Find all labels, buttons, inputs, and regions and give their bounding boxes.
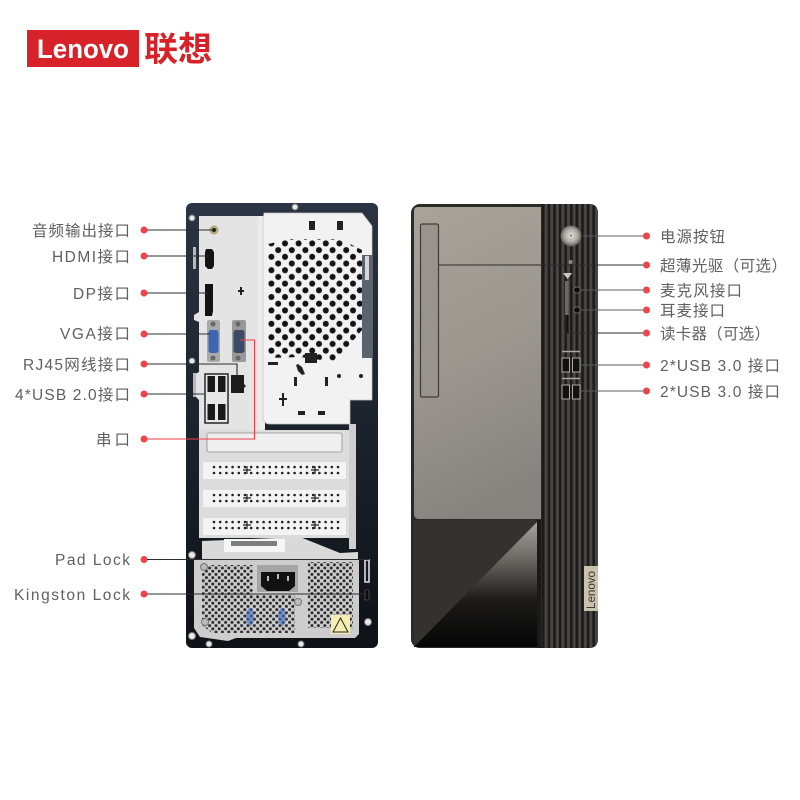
vent plate slots and marks <box>238 221 363 415</box>
callout: DP接口 <box>73 285 208 303</box>
callout: Kingston Lock: Kingston Lock <box>14 587 130 604</box>
optical drive bay <box>420 224 438 397</box>
serial port <box>232 320 246 362</box>
callout: Pad Lock: Pad Lock <box>55 552 130 569</box>
rear backing plate <box>199 216 265 432</box>
callout: 串口: 串口 <box>96 431 130 449</box>
callout: 超薄光驱（可选） <box>439 257 787 275</box>
USB 2.0 ports <box>205 374 228 423</box>
callout: DP接口: DP接口 <box>73 285 130 303</box>
USB port marks <box>562 352 580 378</box>
power socket <box>257 565 298 592</box>
logo: Lenovo 联想 <box>27 22 212 71</box>
callout: 2*USB 3.0 接口 upper <box>580 357 780 375</box>
callout: HDMI接口: HDMI接口 <box>52 248 130 266</box>
expansion slots <box>199 424 356 549</box>
power button <box>560 226 582 246</box>
lower dark panel <box>414 520 541 647</box>
callout: HDMI接口 <box>52 248 208 266</box>
slot crosses <box>243 466 319 529</box>
kingston lock slot <box>365 590 369 600</box>
pad lock loop <box>365 560 369 582</box>
indicator LED <box>568 260 572 264</box>
callout: 耳麦接口 <box>580 302 725 320</box>
callout: 2*USB 3.0 接口 upper: 2*USB 3.0 接口 <box>660 357 780 375</box>
logo: red Lenovo badge: Lenovo <box>37 34 129 64</box>
callout: VGA接口: VGA接口 <box>60 325 130 343</box>
rear mounting screws <box>188 204 372 647</box>
mic jack <box>574 287 580 293</box>
callout: 音频输出接口 <box>32 222 213 240</box>
callouts: rear labels <box>14 222 369 604</box>
callout: 麦克风接口: 麦克风接口 <box>660 282 742 300</box>
barcode label <box>224 539 285 552</box>
callout: 4*USB 2.0接口: 4*USB 2.0接口 <box>15 386 130 404</box>
PSU bracket <box>202 537 358 560</box>
PSU screws <box>200 564 208 570</box>
callout: 音频输出接口: 音频输出接口 <box>32 222 130 240</box>
callout: RJ45网线接口 <box>23 356 237 376</box>
headset jack <box>574 307 580 313</box>
front chassis <box>411 204 598 648</box>
VGA port <box>207 320 220 362</box>
hex vent <box>268 239 362 362</box>
callout: 电源按钮: 电源按钮 <box>660 228 725 246</box>
callout: 2*USB 3.0 接口 lower <box>580 383 780 401</box>
audio out port <box>210 226 218 234</box>
card reader <box>563 273 572 333</box>
callout: 4*USB 2.0接口 <box>15 386 204 404</box>
front USB ports <box>562 358 580 399</box>
callouts: front labels <box>439 228 787 401</box>
callout: VGA接口 <box>60 325 210 343</box>
callout: 麦克风接口 <box>580 282 742 300</box>
callout: 耳麦接口: 耳麦接口 <box>660 302 725 320</box>
Lenovo badge: Lenovo <box>584 571 598 609</box>
rear IO plate <box>193 216 258 432</box>
logo: 联想 wordmark: 联想 <box>144 22 212 71</box>
callout: 读卡器（可选）: 读卡器（可选） <box>660 325 770 343</box>
silver panel <box>414 207 541 519</box>
left clips <box>193 373 196 397</box>
callout: 串口 <box>96 340 254 449</box>
blue wires behind vent <box>246 608 254 626</box>
rear vent plate <box>263 213 372 424</box>
callout: 读卡器（可选） <box>566 316 770 343</box>
ribbed strip <box>542 204 598 648</box>
DP port <box>205 284 213 316</box>
callout: RJ45网线接口: RJ45网线接口 <box>23 356 130 374</box>
callout: 2*USB 3.0 接口 lower: 2*USB 3.0 接口 <box>660 383 780 401</box>
power supply <box>194 560 359 641</box>
logo: red Lenovo badge <box>27 30 139 67</box>
warning sticker <box>331 615 350 634</box>
right side slot <box>362 255 372 358</box>
slot perforations <box>214 467 340 528</box>
panel: front of tower <box>411 204 598 648</box>
panel: rear of tower <box>186 203 378 648</box>
RJ45 port <box>231 375 246 393</box>
gradient triangle <box>414 522 537 647</box>
callout: Pad Lock <box>55 552 369 569</box>
callout: 电源按钮 <box>583 228 725 246</box>
HDMI port <box>205 249 214 269</box>
callout: Kingston Lock <box>14 587 367 604</box>
rear chassis frame <box>186 203 378 648</box>
callout: 超薄光驱（可选）: 超薄光驱（可选） <box>660 257 787 275</box>
